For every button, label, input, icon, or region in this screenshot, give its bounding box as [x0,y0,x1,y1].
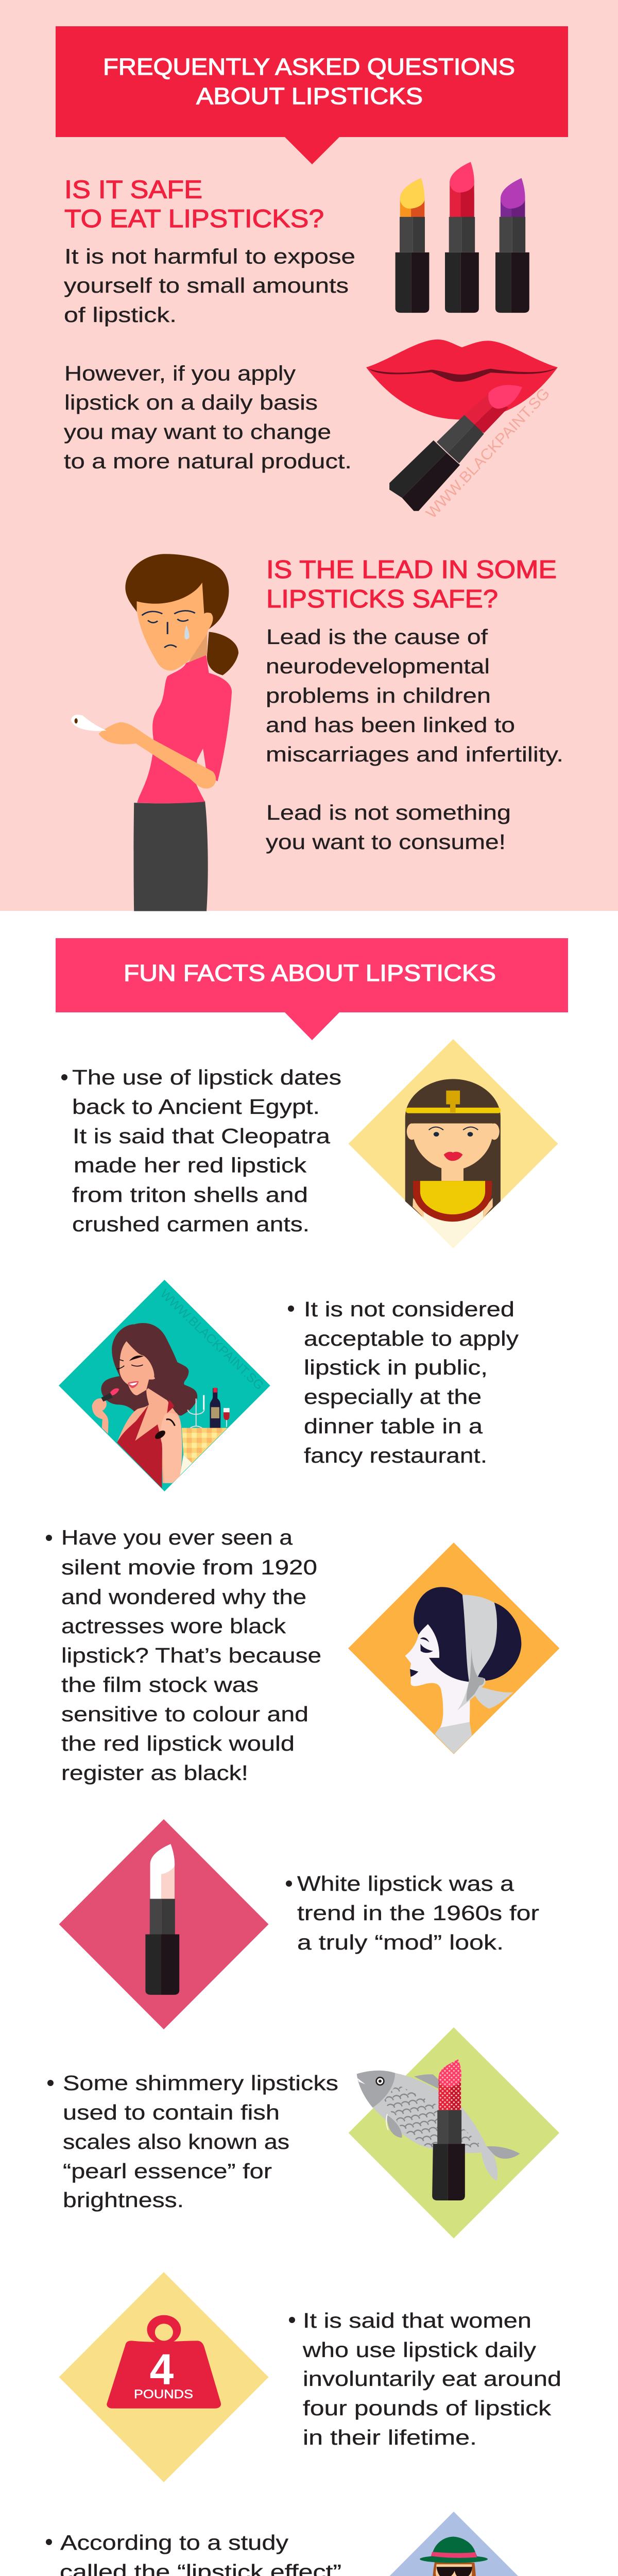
fact 5 text: fish scales [47,2071,338,2212]
text block: is the lead safe: problems in children [266,684,491,707]
fact 1 text: ancient Egypt: made her red lipstick [74,1153,307,1177]
fact 3 text: silent movies: silent movie from 1920 [61,1555,317,1579]
text block: is the lead safe: miscarriages and infertility. [266,742,563,766]
fact 5 text: fish scales: “pearl essence” for [63,2159,272,2183]
fact 4 text: white lipstick [286,1872,539,1954]
fact 6 text: four pounds: four pounds of lipstick [303,2396,552,2420]
fact 6 text: four pounds [289,2309,561,2449]
icon: lips with lipstick [366,340,558,511]
watermark: WWW.BLACKPAINT.SG [423,385,553,522]
icon: woman applying lipstick at dinner: WWW.BLACKPAINT.SG [157,1287,266,1393]
fact 3 text: silent movies: sensitive to colour and [61,1702,308,1726]
fact 3 text: silent movies: the film stock was [61,1673,259,1697]
fact 2 text: public application: especially at the [304,1385,482,1409]
icon: four pound weight [59,2272,269,2482]
text block: is the lead safe: Lead is not something [266,801,511,824]
icon: shopper with bags [349,2512,559,2576]
text block: is the lead safe: Lead is the cause of [266,625,488,649]
fact 1 text: ancient Egypt: It is said that Cleopatra [73,1124,330,1148]
fact 3 text: silent movies: lipstick? That’s because [61,1643,321,1667]
illustration: sad woman holding lipstick [71,554,238,911]
fact 2 text: public application: dinner table in a [304,1414,483,1438]
fact 4 text: white lipstick: a truly “mod” look. [297,1930,504,1954]
icon: white lipstick diamond [59,1819,269,2029]
fact 3 text: silent movies: the red lipstick would [61,1732,295,1755]
panel: FAQ background [0,0,618,911]
fact 7 text: lipstick effect [46,2531,349,2576]
fact 2 text: public application: lipstick in public, [304,1355,488,1379]
fact 5 text: fish scales: scales also known as [63,2130,289,2154]
fact 1 text: ancient Egypt: crushed carmen ants. [72,1212,310,1236]
fact 1 text: ancient Egypt [61,1065,341,1236]
fact 5 text: fish scales: used to contain fish [63,2100,280,2124]
fact 5 text: fish scales: Some shimmery lipsticks [63,2071,338,2095]
fact 3 text: silent movies: Have you ever seen a [61,1526,293,1549]
fact 7 text: lipstick effect: According to a study [60,2531,289,2554]
fact 1 text: ancient Egypt: from triton shells and [72,1183,308,1207]
fact 1 text: ancient Egypt: The use of lipstick dates [72,1065,341,1089]
icon: three lipsticks [396,162,529,313]
fact 2 text: public application: acceptable to apply [304,1327,519,1350]
fact 6 text: four pounds: in their lifetime. [303,2426,477,2449]
icon: fish and shimmery lipstick [349,2027,559,2239]
text block: is the lead safe: you want to consume! [266,830,506,854]
fact 3 text: silent movies: and wondered why the [61,1585,306,1608]
text block: is it safe to eat lipsticks: to a more natural product. [64,449,352,473]
icon: four pound weight: POUNDS [134,2387,193,2401]
banner: FAQ heading [56,26,568,164]
fact 3 text: silent movies: register as black! [61,1761,248,1785]
fact 4 text: white lipstick: White lipstick was a [297,1872,514,1895]
text block: is it safe to eat lipsticks [64,176,355,473]
fact 1 text: ancient Egypt: back to Ancient Egypt. [72,1095,320,1118]
banner: fun facts heading: FUN FACTS ABOUT LIPSTICKS [124,960,496,986]
text block: is the lead safe [266,556,563,854]
text block: is the lead safe: and has been linked to [266,713,515,737]
text block: is it safe to eat lipsticks: IS IT SAFE [64,176,202,204]
banner: FAQ heading: FREQUENTLY ASKED QUESTIONS [103,54,515,80]
fact 3 text: silent movies: actresses wore black [61,1614,286,1638]
fact 5 text: fish scales: brightness. [63,2188,184,2212]
fact 2 text: public application: fancy restaurant. [304,1444,487,1467]
fact 3 text: silent movies [46,1526,321,1785]
fact 6 text: four pounds: who use lipstick daily [302,2338,537,2362]
banner: fun facts heading [56,938,568,1040]
icon: silent film actress [348,1543,559,1754]
banner: FAQ heading: ABOUT LIPSTICKS [196,83,423,109]
fact 6 text: four pounds: It is said that women [303,2309,531,2332]
text block: is the lead safe: LIPSTICKS SAFE? [266,585,498,613]
text block: is it safe to eat lipsticks: you may want to change [64,420,331,444]
text block: is it safe to eat lipsticks: It is not harmful to expose [64,244,355,268]
text block: is it safe to eat lipsticks: lipstick on a daily basis [64,391,318,414]
text block: is it safe to eat lipsticks: yourself to small amounts [64,274,349,297]
text block: is the lead safe: neurodevelopmental [266,654,490,678]
text block: is it safe to eat lipsticks: TO EAT LIPSTICKS? [64,205,324,233]
fact 4 text: white lipstick: trend in the 1960s for [297,1901,539,1925]
icon: four pound weight: 4 [150,2345,174,2394]
fact 6 text: four pounds: involuntarily eat around [303,2367,561,2391]
icon: woman applying lipstick at dinner [59,1280,270,1492]
text block: is it safe to eat lipsticks: of lipstick. [64,303,177,327]
text block: is the lead safe: IS THE LEAD IN SOME [266,556,557,584]
fact 2 text: public application: It is not considered [304,1297,514,1321]
icon: Cleopatra diamond [348,1039,558,1248]
text block: is it safe to eat lipsticks: However, if you apply [64,362,296,385]
fact 2 text: public application [288,1297,519,1467]
